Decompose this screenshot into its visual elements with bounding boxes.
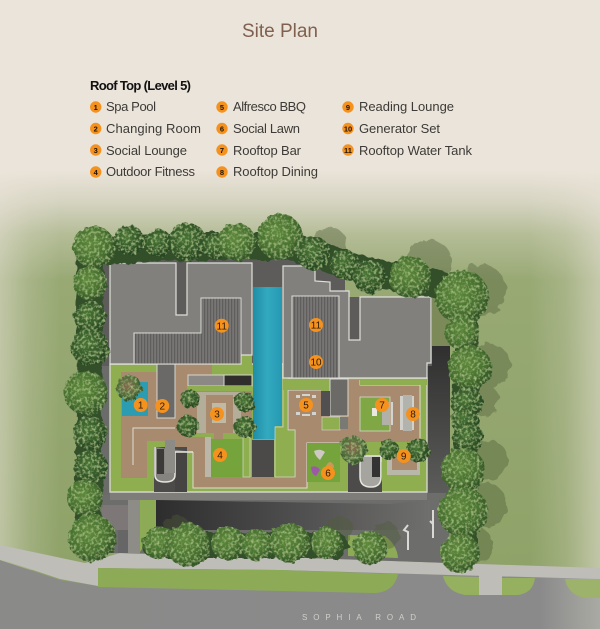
legend item 5: 5: [220, 103, 224, 112]
marker 5: 5: [303, 401, 309, 412]
legend item 11: Rooftop Water Tank: [359, 143, 472, 158]
marker 11 right: 11: [311, 321, 322, 332]
outdoor fitness lawn: [205, 437, 250, 477]
right deck: [288, 380, 420, 477]
podium trees: [116, 375, 430, 464]
legend item 10: Generator Set: [359, 121, 440, 136]
right staircase: [348, 456, 382, 492]
marker 7: 7: [379, 401, 385, 412]
marker 10: [309, 355, 323, 369]
marker 11 right: [309, 318, 323, 332]
road label: SOPHIA ROAD: [302, 613, 416, 622]
podium lawn: [110, 364, 427, 492]
deck outline strokes: [133, 380, 420, 488]
deck bottom strip: [193, 477, 307, 488]
service pit below pool: [252, 440, 274, 477]
legend heading: Roof Top (Level 5): [90, 78, 191, 93]
hedge underlay: [88, 246, 466, 545]
legend item 11: 11: [344, 146, 352, 155]
outer roof right buffer: [432, 298, 456, 346]
lawn beside pool: [275, 378, 295, 477]
legend item 1: 1: [94, 103, 98, 112]
social lawn: [307, 443, 340, 482]
perimeter trees: [64, 214, 492, 573]
marker 5: [299, 398, 313, 412]
legend item 4: Outdoor Fitness: [106, 164, 196, 179]
legend item 1: Spa Pool: [106, 99, 156, 114]
legend item 8: 8: [220, 168, 224, 177]
marker 11 left: [215, 319, 229, 333]
left deck: [121, 364, 252, 478]
marker 1: [134, 398, 148, 412]
marker 1: 1: [138, 401, 144, 412]
shaded wood area around roofs: [100, 258, 432, 366]
right roof: [283, 266, 431, 378]
marker 4: [213, 448, 227, 462]
podium gardens: [110, 355, 427, 492]
legend item 7: 7: [220, 146, 224, 155]
right roof water tank ribs: [292, 296, 339, 378]
rooftop buildings: [110, 263, 431, 378]
marker 6: 6: [325, 469, 331, 480]
changing room: [157, 364, 175, 418]
legend item 6: 6: [220, 124, 224, 133]
legend: [90, 78, 472, 179]
generator box: [321, 379, 348, 430]
legend item 7: Rooftop Bar: [233, 143, 302, 158]
marker 7: [375, 398, 389, 412]
legend item 2: 2: [94, 124, 98, 133]
rooftop bar lawn: [360, 397, 393, 431]
pool lower: [253, 360, 282, 439]
swimming pool upper: [253, 287, 282, 367]
marker 4: 4: [217, 451, 223, 462]
plan markers: [134, 318, 420, 480]
driveway: [100, 345, 450, 563]
marker 3: [210, 407, 224, 421]
marker 8: [406, 407, 420, 421]
reading lounge paving: [387, 456, 420, 475]
legend item 5: Alfresco BBQ: [233, 99, 306, 114]
marker 9: [397, 449, 411, 463]
legend item 8: Rooftop Dining: [233, 164, 318, 179]
legend item 9: 9: [346, 103, 350, 112]
marker 2: 2: [160, 402, 166, 413]
legend item 6: Social Lawn: [233, 121, 300, 136]
legend item 10: 10: [344, 124, 352, 133]
tree shadows on lawn: [161, 227, 510, 563]
title: Site Plan: [242, 21, 318, 42]
legend item 9: Reading Lounge: [359, 99, 454, 114]
alfresco bbq seating: [296, 394, 316, 416]
legend item 3: Social Lounge: [106, 143, 187, 158]
marker 2: [155, 399, 169, 413]
grass lawn: [0, 170, 600, 629]
lawn by left roof: [212, 355, 252, 375]
legend item 2: Changing Room: [106, 121, 201, 136]
marker 9: 9: [401, 452, 407, 463]
spa pool: [122, 382, 148, 416]
left roof: [110, 263, 252, 364]
legend item 4: 4: [94, 168, 99, 177]
rooftop dining table: [400, 395, 414, 431]
marker 6: [321, 466, 335, 480]
top lawn far right: [360, 379, 427, 385]
road and pavement: [0, 545, 600, 629]
legend item 3: 3: [94, 146, 98, 155]
social lounge paving: [187, 375, 252, 440]
marker 3: 3: [214, 410, 220, 421]
left staircase: [154, 440, 193, 492]
top lawn right: [283, 379, 330, 390]
marker 10: 10: [310, 358, 322, 369]
left roof water tank ribs: [134, 298, 241, 364]
marker 11 left: 11: [217, 321, 227, 332]
marker 8: 8: [410, 410, 416, 421]
